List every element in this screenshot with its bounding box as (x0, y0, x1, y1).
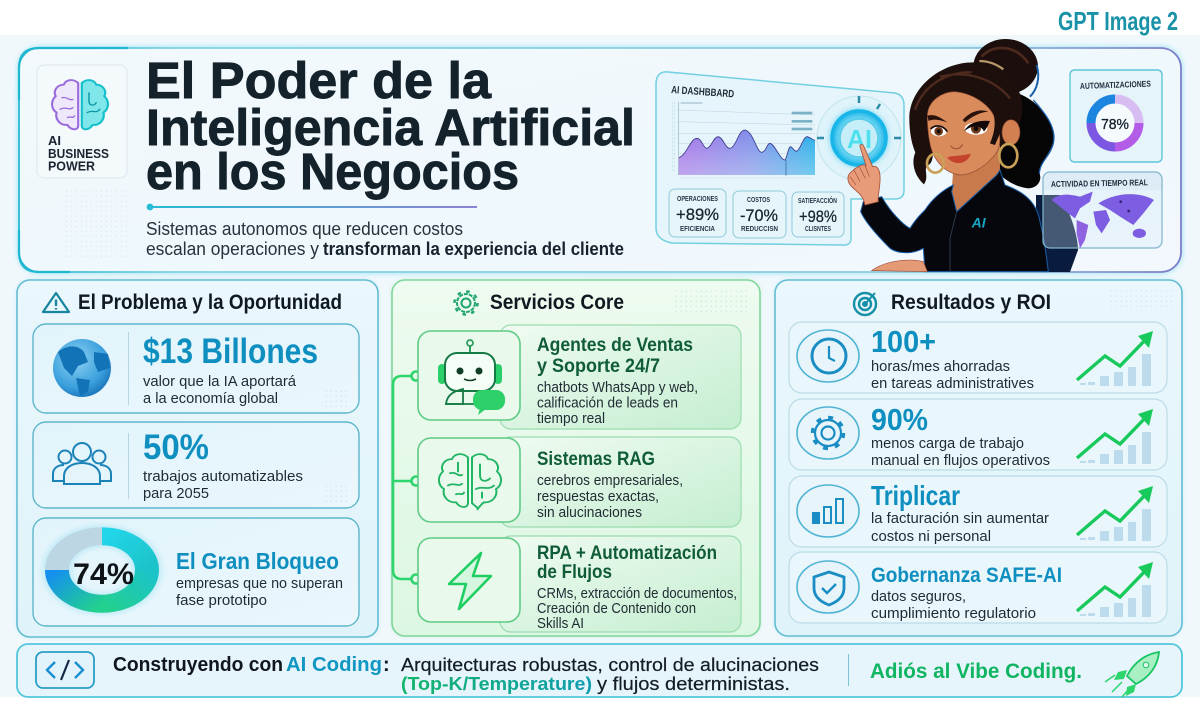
logo text: BUSINESS (48, 147, 109, 161)
card: RPA + Automatizacion: CRMs, extracción de documentos, (537, 586, 737, 602)
icon: globe (53, 339, 111, 397)
banner heading: Construyendo con (113, 654, 283, 676)
banner text: Arquitecturas robustas, control de alucinaciones (401, 654, 819, 675)
card: Agentes de Ventas: calificación de leads en (537, 396, 678, 412)
card: automatizaciones: AUTOMATIZACIONES (1080, 79, 1151, 91)
icon: AI holographic button: AI (847, 124, 872, 154)
stat: satisfaccion: CLISNTES (805, 224, 831, 233)
illustration: woman with AI jacket (848, 39, 1054, 272)
woman jacket (861, 170, 1048, 272)
growth chart (1077, 409, 1153, 464)
row: Gobernanza SAFE-AI: datos seguros, (871, 589, 966, 605)
row: 90% (789, 399, 1167, 470)
stat: operaciones: OPERACIONES (677, 194, 718, 203)
icon: warning triangle (43, 293, 69, 312)
stat: costos: COSTOS (747, 195, 770, 204)
growth chart (1077, 331, 1153, 386)
icon: target (854, 293, 876, 315)
card: El Gran Bloqueo: 74% (73, 558, 134, 591)
card: El Gran Bloqueo: fase prototipo (176, 593, 267, 609)
subtitle: escalan operaciones y (146, 239, 319, 259)
decorative dots area (62, 190, 128, 260)
donut 78% (1091, 99, 1139, 147)
connector line (393, 372, 420, 584)
card: Agentes de Ventas (418, 325, 741, 429)
card: Agentes de Ventas: y Soporte 24/7 (537, 355, 660, 377)
card: Sistemas RAG: cerebros empresariales, (537, 473, 683, 489)
panel: AI dashboard (656, 72, 904, 245)
icon: brain (439, 454, 501, 509)
icon: AI holographic button (817, 96, 901, 180)
icon: logo brain (52, 80, 108, 129)
banner heading (113, 654, 390, 676)
growth chart (1077, 486, 1153, 541)
title: Inteligencia Artificial (146, 99, 635, 156)
heading: El Problema y la Oportunidad (78, 291, 342, 314)
heading: Servicios Core (490, 291, 624, 314)
woman earrings (927, 144, 1017, 173)
card: 50%: para 2055 (143, 486, 209, 502)
donut 74% (57, 536, 147, 604)
card: El Gran Bloqueo: empresas que no superan (176, 576, 343, 592)
row: 90%: 90% (871, 402, 928, 437)
logo text: POWER (48, 160, 95, 174)
row: Gobernanza SAFE-AI (789, 552, 1167, 623)
dashboard heading: AI DASHBBARD (671, 84, 735, 100)
row: Triplicar: costos ni personal (871, 529, 991, 545)
stat: costos (733, 191, 786, 238)
growth chart (1077, 562, 1153, 617)
card: $13 Billones: a la economía global (143, 391, 278, 407)
title (146, 52, 635, 200)
logo text: AI (48, 134, 61, 148)
woman forearm on desk (872, 260, 927, 272)
panel: Resultados y ROI (775, 280, 1182, 636)
card: RPA + Automatizacion: de Flujos (537, 561, 612, 583)
title: en los Negocios (146, 143, 519, 200)
icon: people (53, 443, 111, 484)
panel: Servicios Core (392, 280, 760, 636)
logo text (48, 134, 109, 174)
area chart (672, 102, 815, 179)
row: Triplicar: Triplicar (871, 480, 960, 511)
stat: operaciones (669, 189, 726, 237)
world map (1052, 192, 1154, 248)
stat: satisfaccion (792, 192, 844, 237)
logo: AI Business Power (37, 65, 127, 178)
stat: satisfaccion: +98% (799, 207, 837, 226)
chair behind woman (1036, 195, 1078, 272)
card: automatizaciones (1070, 70, 1162, 162)
card: RPA + Automatizacion: Skills AI (537, 616, 584, 632)
card: $13 Billones: $13 Billones (143, 332, 318, 371)
card: $13 Billones: valor que la IA aportará (143, 374, 297, 390)
icon: gear (812, 418, 844, 448)
row: 90%: manual en flujos operativos (871, 453, 1050, 469)
icon: lightning bolt (449, 553, 491, 609)
card: actividad en tiempo real (1043, 172, 1162, 248)
subtitle: transforman la experiencia del cliente (323, 239, 624, 259)
card: Sistemas RAG (418, 437, 741, 527)
woman neck (952, 145, 1000, 215)
banner heading: : (383, 654, 390, 676)
stat: operaciones: EFICIENCIA (680, 224, 716, 233)
card: Sistemas RAG: Sistemas RAG (537, 448, 655, 470)
icon: clock (812, 339, 846, 373)
icon: code brackets (36, 652, 94, 688)
banner text (401, 654, 819, 694)
banner text: (Top-K/Temperature) (401, 673, 592, 694)
row: Triplicar (789, 476, 1167, 547)
icon: robot (438, 340, 505, 415)
card: RPA + Automatizacion (418, 536, 741, 632)
card: El Gran Bloqueo (33, 518, 359, 626)
card: Agentes de Ventas: tiempo real (537, 411, 605, 427)
panel: hero header (19, 39, 1181, 272)
subtitle (146, 219, 624, 259)
row: 100+: horas/mes ahorradas (871, 359, 1010, 375)
banner heading: AI Coding (286, 654, 382, 676)
panel: El Problema y la Oportunidad (17, 280, 378, 637)
card: 50%: 50% (143, 428, 209, 467)
card: Sistemas RAG: respuestas exactas, (537, 489, 659, 505)
card: RPA + Automatizacion: Creación de Contenido con (537, 601, 696, 617)
woman hand pointing (848, 145, 880, 205)
icon: shield (814, 572, 844, 605)
banner text: y flujos deterministas. (597, 673, 790, 694)
icon: rocket (1105, 652, 1159, 697)
card: 50%: trabajos automatizables (143, 469, 303, 485)
card: $13 Billones (33, 324, 359, 413)
heading: Resultados y ROI (891, 291, 1051, 314)
row: Gobernanza SAFE-AI: cumplimiento regulatorio (871, 606, 1036, 622)
card: El Gran Bloqueo: El Gran Bloqueo (176, 548, 339, 574)
woman face (927, 92, 1020, 175)
icon: bars (813, 499, 843, 523)
card: automatizaciones: 78% (1101, 116, 1129, 133)
row: Triplicar: la facturación sin aumentar (871, 511, 1049, 527)
card: Agentes de Ventas: chatbots WhatsApp y web, (537, 380, 698, 396)
banner slogan: Adiós al Vibe Coding. (870, 660, 1082, 683)
title underline (147, 204, 477, 210)
woman hair back and bun (909, 39, 1054, 188)
woman jacket: AI (971, 214, 987, 230)
card: Sistemas RAG: sin alucinaciones (537, 505, 642, 521)
row: 90%: menos carga de trabajo (871, 436, 1024, 452)
row: 100+: en tareas administratives (871, 376, 1034, 392)
title: El Poder de la (146, 52, 492, 109)
row: Gobernanza SAFE-AI: Gobernanza SAFE-AI (871, 564, 1062, 587)
stat: costos: -70% (740, 206, 778, 225)
stat: operaciones: +89% (676, 205, 719, 224)
card: RPA + Automatizacion: RPA + Automatización (537, 542, 717, 564)
card: actividad en tiempo real: ACTIVIDAD EN TIEMPO REAL (1051, 177, 1148, 189)
panel: bottom banner (17, 644, 1182, 697)
icon: gear heading (454, 292, 478, 314)
card: 50% (33, 422, 359, 508)
card: Agentes de Ventas: Agentes de Ventas (537, 334, 693, 356)
row: 100+: 100+ (871, 324, 936, 359)
stat: satisfaccion: SATIEFACCIÓN (798, 196, 837, 205)
stat: costos: REDUCCISN (741, 224, 778, 233)
row: 100+ (789, 322, 1167, 393)
subtitle: Sistemas autonomos que reducen costos (146, 219, 463, 239)
